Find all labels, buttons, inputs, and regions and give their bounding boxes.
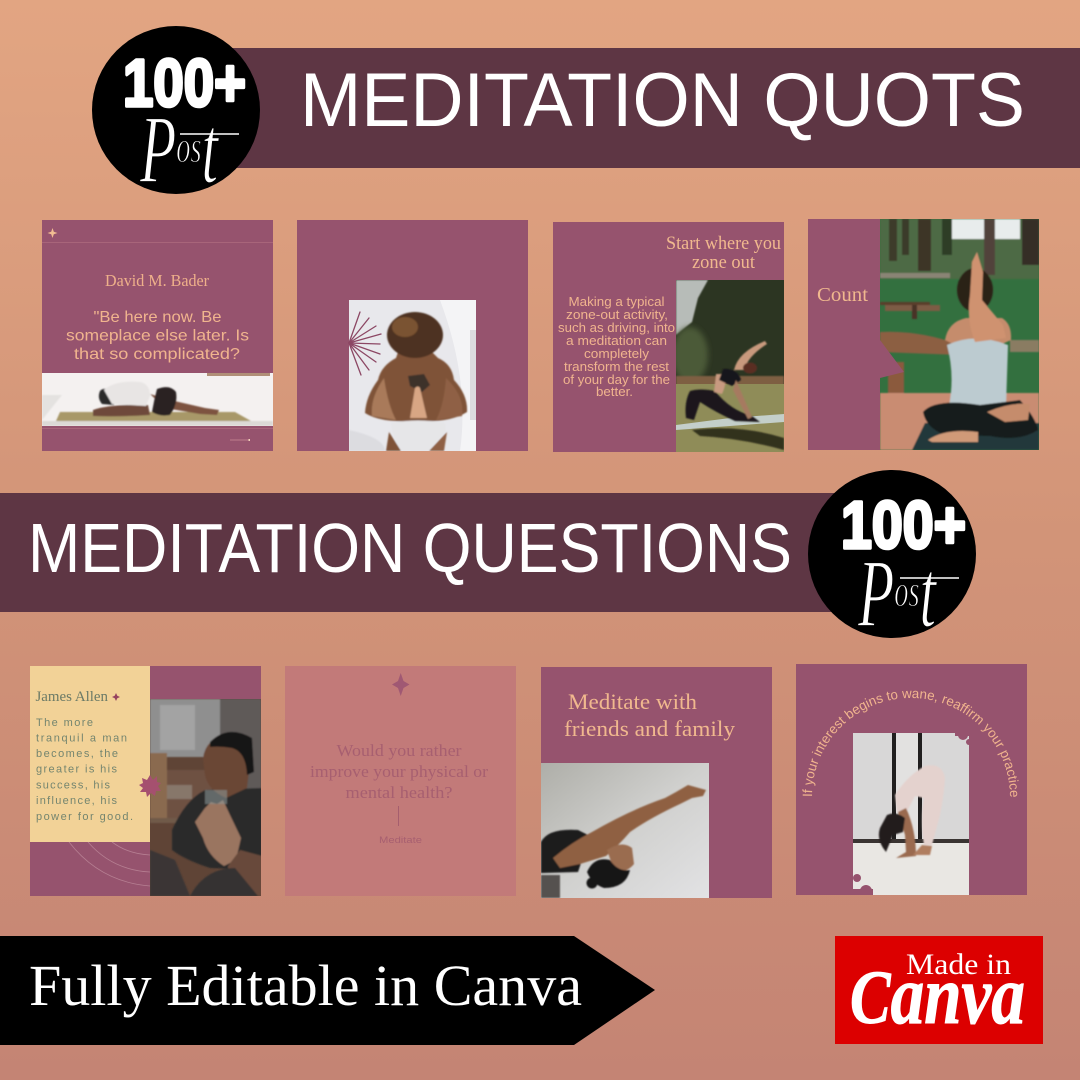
body text: Making a typical xyxy=(568,294,665,309)
question text: improve your physical or xyxy=(310,762,488,781)
quote text xyxy=(66,309,249,363)
divider and star xyxy=(42,228,273,243)
photo: seated eagle arms xyxy=(880,219,1039,450)
panel: back prayer pose xyxy=(297,220,528,451)
panel title: Meditate with xyxy=(568,689,697,714)
quote text: power for good. xyxy=(36,811,133,823)
footer line and pager xyxy=(42,428,273,441)
quote text: "Be here now. Be xyxy=(94,309,222,326)
call to action arrow: Fully Editable in Canva xyxy=(0,936,655,1045)
arrow notch xyxy=(880,340,904,378)
question text xyxy=(310,741,488,802)
panel background xyxy=(541,667,772,898)
panel: James Allen quote xyxy=(30,666,262,896)
body text: such as driving, into xyxy=(558,320,675,335)
panel: meditate with friends and family xyxy=(541,667,772,898)
question text: mental health? xyxy=(346,783,452,802)
call to action text: Fully Editable in Canva xyxy=(29,953,582,1018)
photo: child's pose xyxy=(42,373,273,426)
badge: Made in Canva xyxy=(835,936,1043,1044)
panel background xyxy=(796,664,1027,895)
badge text: Made in: Made in xyxy=(906,948,1011,981)
heading: Meditation Quots: MEDITATION QUOTS xyxy=(300,58,1025,143)
heading: Meditation Questions: MEDITATION QUESTIONS xyxy=(28,509,792,587)
badge: 100+ Post: P xyxy=(139,96,176,203)
panel: if your interest begins to wane xyxy=(796,664,1027,895)
icon: small star xyxy=(112,693,120,701)
quote text: tranquil a man xyxy=(36,733,127,745)
top banner: Meditation Quots xyxy=(92,26,1080,203)
red badge background xyxy=(835,936,1043,1044)
badge: 100+ Post: t xyxy=(920,540,937,647)
badge: 100+ Post xyxy=(92,26,260,203)
badge: 100+ Post: os xyxy=(176,121,202,172)
quote text: influence, his xyxy=(36,795,118,807)
badge: 100+ Post: t xyxy=(202,96,219,203)
label: Meditate: Meditate xyxy=(379,835,422,846)
panel background xyxy=(297,220,528,451)
body text: transform the rest xyxy=(564,359,669,374)
panel background xyxy=(553,222,784,452)
panel background xyxy=(285,666,516,896)
panel: David M. Bader quote xyxy=(42,220,273,451)
quote text xyxy=(36,717,133,823)
panel background xyxy=(808,219,1039,450)
quote text: that so complicated? xyxy=(74,346,240,363)
badge: 100+ Post: os xyxy=(894,565,920,616)
arrow shape xyxy=(0,936,655,1045)
badge: 100+ Post: P xyxy=(857,540,894,647)
body text: of your day for the xyxy=(563,372,670,387)
decorative arcs xyxy=(69,842,150,886)
photo: backbend stretch xyxy=(541,763,709,898)
panel title: zone out xyxy=(692,253,756,273)
photo: side stretch in park xyxy=(672,280,784,452)
panel background xyxy=(30,666,261,896)
icon: four-point star xyxy=(392,673,410,696)
badge text: Canva: Canva xyxy=(850,949,1025,1042)
body text xyxy=(558,294,675,399)
panel title: Count xyxy=(817,284,868,306)
question text: Would you rather xyxy=(336,741,462,760)
photo: man meditating xyxy=(150,699,262,896)
curved text: If your interest begins to wane, reaffirm your practice xyxy=(802,690,1019,797)
panel title: Start where you xyxy=(666,234,781,254)
badge: 100+ Post: 100+ xyxy=(841,488,966,563)
icon: sunburst xyxy=(349,312,381,375)
panel title xyxy=(564,689,736,741)
body text: zone-out activity, xyxy=(566,307,668,322)
puzzle notches xyxy=(853,730,972,897)
panel title xyxy=(666,234,781,273)
quote text: The more xyxy=(36,717,93,729)
icon: pink starburst xyxy=(139,775,161,797)
quote text: someplace else later. Is xyxy=(66,328,249,344)
panel background xyxy=(42,220,273,451)
badge: 100+ Post xyxy=(808,470,976,647)
quote text: becomes, the xyxy=(36,748,118,760)
author name: David M. Bader xyxy=(105,271,209,290)
quote text: success, his xyxy=(36,779,110,791)
panel: Count xyxy=(808,219,1039,450)
vertical divider xyxy=(398,806,399,826)
badge: 100+ Post: 100+ xyxy=(123,46,246,121)
panel: would you rather xyxy=(285,666,516,896)
panel title: friends and family xyxy=(564,716,736,741)
middle banner: Meditation Questions xyxy=(0,470,976,647)
banner bar xyxy=(230,48,1080,168)
quote text: greater is his xyxy=(36,764,118,776)
author name: James Allen xyxy=(36,689,108,705)
photo: standing forward fold xyxy=(853,730,972,897)
body text: better. xyxy=(596,384,633,399)
banner bar xyxy=(0,493,880,612)
body text: completely xyxy=(584,346,650,361)
photo: woman from behind xyxy=(349,300,476,451)
body text: a meditation can xyxy=(566,333,667,348)
panel: start where you zone out xyxy=(553,222,784,452)
cream quote block xyxy=(30,666,150,842)
